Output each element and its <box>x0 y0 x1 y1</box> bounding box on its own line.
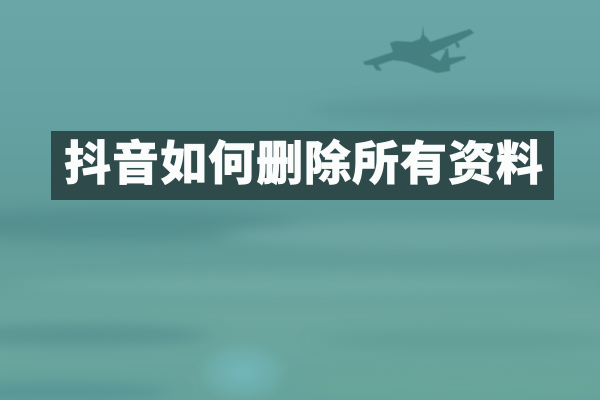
glow: sun through haze <box>193 338 293 400</box>
title: 抖音如何删除所有资料 <box>64 137 544 190</box>
icon: airplane silhouette <box>363 25 474 73</box>
title banner <box>51 131 554 200</box>
